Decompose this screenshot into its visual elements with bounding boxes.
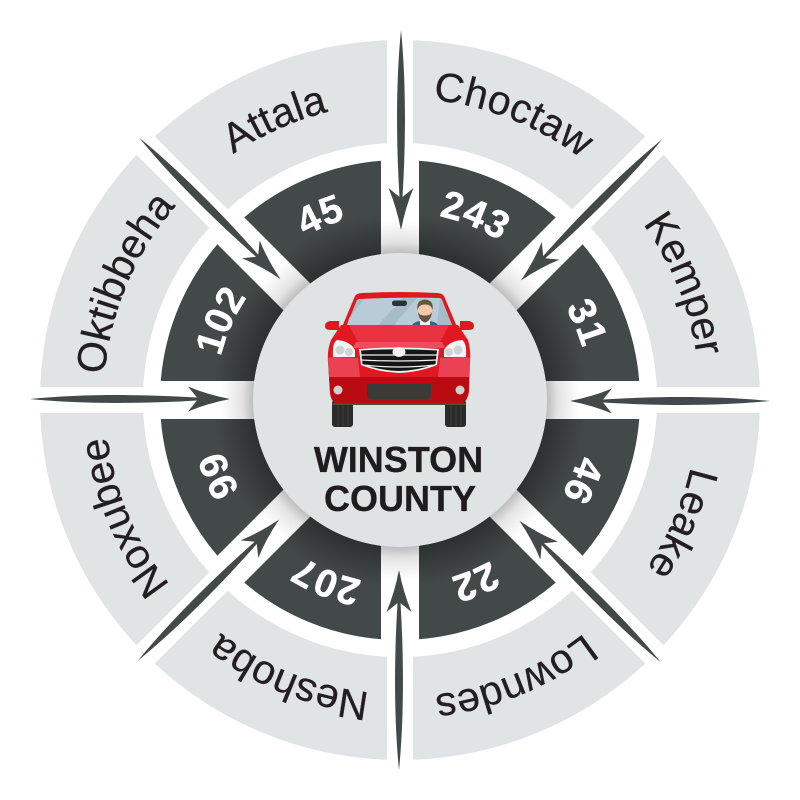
cabin frame — [342, 292, 457, 327]
hub circle — [253, 253, 547, 547]
panel: Choctaw 243 — [413, 40, 645, 284]
headlights — [333, 340, 466, 357]
wheels — [332, 400, 466, 427]
bumper underside — [332, 403, 466, 405]
panel: Leake 46: Leake — [650, 470, 718, 576]
title: Winston County: WINSTON — [314, 439, 483, 480]
panel: Kemper 31: 31 — [568, 299, 606, 348]
panel: Choctaw 243: Choctaw — [436, 73, 594, 155]
arrow: left — [30, 386, 230, 412]
arrow: lower left — [129, 511, 288, 670]
panel: Oktibbeha 102 — [40, 155, 284, 387]
arrow: upper right — [512, 130, 671, 289]
panel: Noxubee 99 — [40, 413, 284, 645]
panel: Neshoba 207: Neshoba — [213, 633, 367, 720]
side panels — [328, 357, 470, 377]
hood highlight — [349, 325, 449, 342]
title: Winston County: COUNTY — [324, 478, 476, 519]
panel: Lowndes 22: Lowndes — [436, 635, 598, 716]
arrow: top — [388, 30, 414, 230]
panel: Kemper 31 — [516, 155, 760, 387]
panel: Oktibbeha 102: Oktibbeha — [78, 197, 176, 372]
shadow ring around hub — [220, 220, 580, 580]
panel: Neshoba 207 — [155, 516, 387, 760]
fog lights — [334, 386, 464, 394]
panel: Noxubee 99: 99 — [200, 454, 237, 499]
panel: Attala 45: Attala — [228, 90, 328, 154]
panel: Oktibbeha 102: 102 — [197, 287, 246, 355]
arrow: bottom — [386, 570, 412, 770]
arrow: lower right — [511, 512, 670, 671]
panel: Attala 45: 45 — [301, 194, 342, 232]
panel: Lowndes 22 — [413, 516, 645, 760]
panel: Neshoba 207: 207 — [290, 561, 362, 605]
panel: Lowndes 22: 22 — [452, 561, 498, 601]
panel: Noxubee 99: Noxubee — [86, 440, 168, 600]
panel: Kemper 31: Kemper — [644, 210, 718, 353]
panel: Attala 45 — [155, 40, 387, 284]
arrow: right — [570, 388, 770, 414]
car body — [328, 325, 470, 404]
panel: Leake 46 — [516, 413, 760, 645]
grille — [359, 347, 439, 373]
title: Winston County — [314, 439, 483, 519]
side mirrors — [325, 321, 474, 330]
air intake — [367, 384, 431, 400]
driver — [412, 300, 438, 325]
windshield — [347, 298, 452, 325]
arrow: upper left — [130, 129, 289, 288]
panel: Leake 46: 46 — [564, 457, 601, 504]
panel: Choctaw 243: 243 — [440, 192, 510, 238]
icon: red car with driver — [325, 292, 474, 427]
lower bumper — [329, 377, 469, 404]
